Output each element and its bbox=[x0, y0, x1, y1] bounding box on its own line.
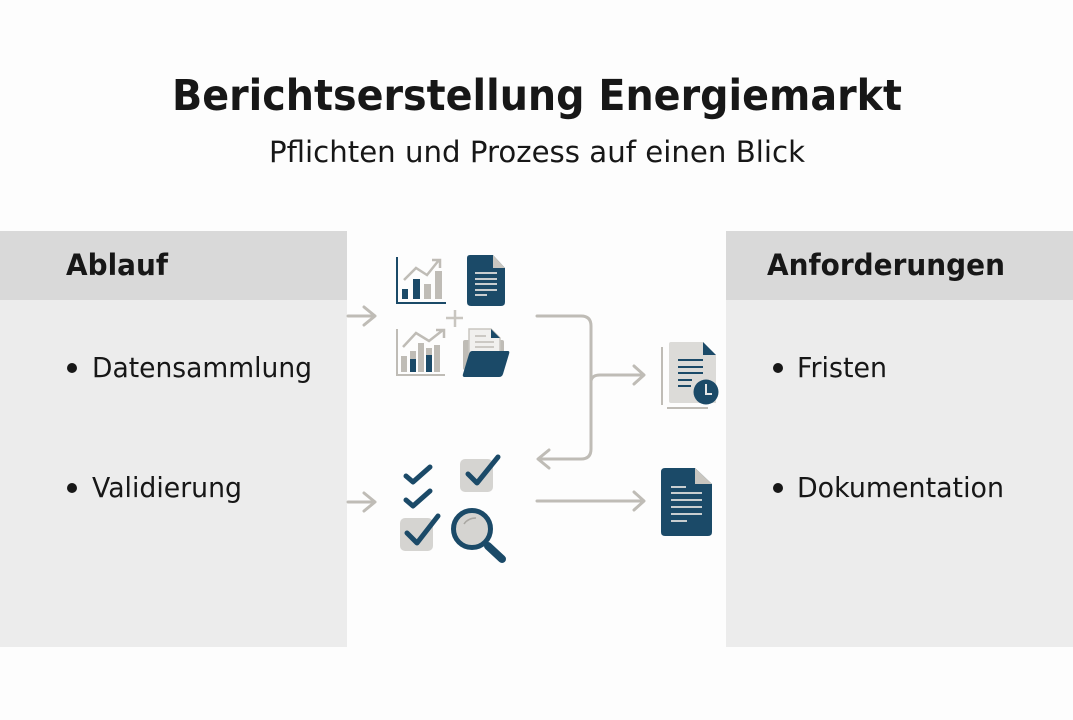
icon: report with clock bbox=[662, 342, 718, 408]
panel: Ablauf bbox=[0, 231, 347, 647]
heading: Ablauf bbox=[0, 231, 347, 300]
icon: checks bbox=[400, 457, 498, 551]
icon: bar chart top bbox=[397, 257, 446, 303]
heading: Anforderungen: Anforderungen bbox=[767, 248, 1005, 282]
heading: Ablauf: Ablauf bbox=[66, 248, 168, 282]
panel: Anforderungen bbox=[726, 231, 1073, 647]
icon: bar chart bottom bbox=[397, 329, 445, 375]
icon: document top bbox=[467, 255, 505, 306]
list item: Datensammlung: Datensammlung bbox=[92, 351, 312, 384]
arrow: Validierung to check icons bbox=[348, 493, 375, 511]
list item: Validierung: Validierung bbox=[92, 471, 242, 504]
arrow: bracket merge to report bbox=[537, 316, 644, 468]
icon: magnifier bbox=[454, 510, 502, 559]
icon: document bottom bbox=[661, 468, 712, 536]
subtitle: Pflichten und Prozess auf einen Blick bbox=[269, 135, 805, 169]
list item: Fristen: Fristen bbox=[797, 351, 887, 384]
arrow: checks to document bbox=[537, 492, 644, 510]
icon: folder bbox=[463, 329, 509, 377]
icon: plus bbox=[446, 310, 463, 327]
title: Berichtserstellung Energiemarkt bbox=[172, 71, 902, 121]
heading: Anforderungen bbox=[726, 231, 1073, 300]
list item: Dokumentation: Dokumentation bbox=[797, 471, 1004, 504]
arrow: Ablauf to data icons bbox=[348, 307, 375, 325]
